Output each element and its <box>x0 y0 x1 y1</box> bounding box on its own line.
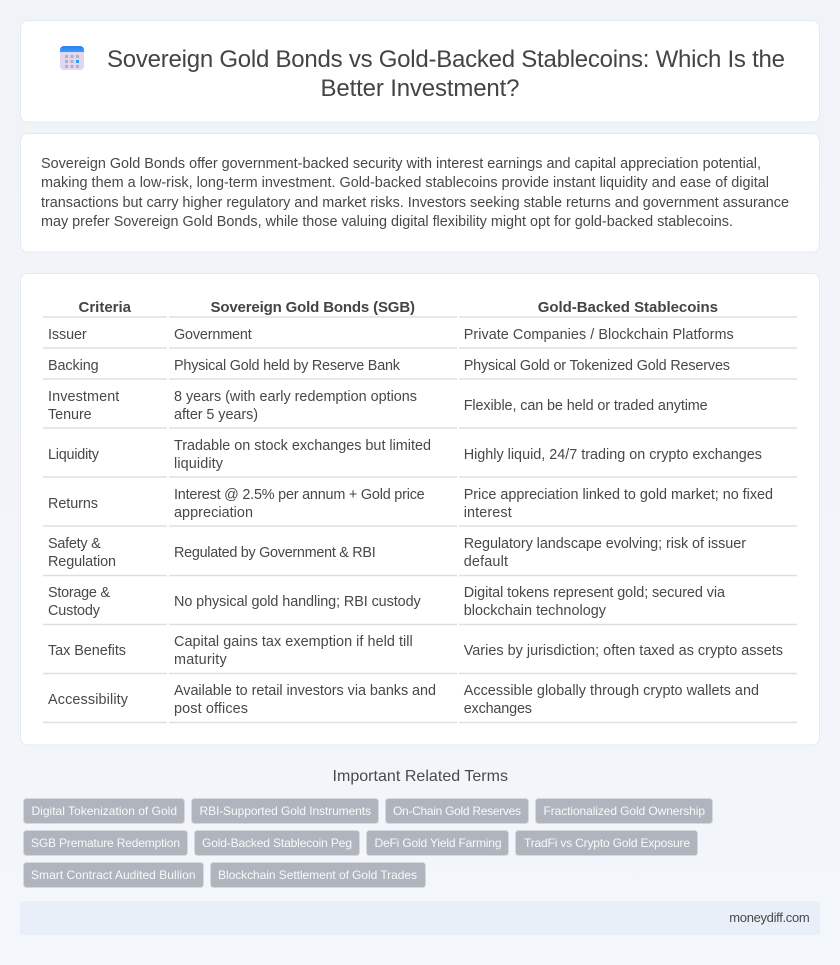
tag <box>536 798 712 824</box>
row: tax benefits: Tax Benefits <box>48 643 126 659</box>
row: issuer <box>48 327 734 343</box>
row: backing: Physical Gold held by Reserve Bank <box>174 358 401 374</box>
title: Better Investment? <box>320 75 520 102</box>
row: backing: Physical Gold or Tokenized Gold Reserves <box>464 358 730 374</box>
row: accessibility <box>48 683 759 717</box>
tag <box>24 862 204 888</box>
row: safety and regulation: Safety & <box>48 536 101 552</box>
header card <box>20 20 820 122</box>
row: tax benefits: Capital gains tax exemption if held till <box>174 634 413 650</box>
summary text: Sovereign Gold Bonds offer government-backed security with interest earnings and capital appreciation potential, <box>41 156 761 172</box>
row: backing: Backing <box>48 358 99 374</box>
row: liquidity: Highly liquid, 24/7 trading on crypto exchanges <box>464 447 762 463</box>
row: tax benefits: maturity <box>174 652 227 668</box>
row: liquidity: Tradable on stock exchanges but limited <box>174 438 431 454</box>
tag <box>386 798 528 824</box>
tag: Digital Tokenization of Gold <box>32 804 177 818</box>
row: accessibility: Accessibility <box>48 692 129 708</box>
tag: Blockchain Settlement of Gold Trades <box>218 868 417 882</box>
row: liquidity: Liquidity <box>48 447 100 463</box>
row: accessibility: exchanges <box>464 701 532 717</box>
tag <box>192 798 378 824</box>
icon: calendar <box>60 46 84 70</box>
footer bar <box>20 901 820 935</box>
summary text: transactions but carry higher regulatory and market risks. Investors seeking stable returns and government assurance <box>41 195 789 211</box>
row: safety and regulation: Regulatory landscape evolving; risk of issuer <box>464 536 746 552</box>
tag <box>194 830 360 856</box>
tag: Fractionalized Gold Ownership <box>544 804 705 818</box>
row: backing <box>48 358 730 374</box>
row: storage and custody: Storage & <box>48 585 110 601</box>
tag: DeFi Gold Yield Farming <box>374 836 502 850</box>
row: returns: Interest @ 2.5% per annum + Gold price <box>174 487 425 503</box>
row: storage and custody: No physical gold handling; RBI custody <box>174 594 421 610</box>
tag <box>516 830 698 856</box>
title <box>107 46 785 102</box>
row: tax benefits: Varies by jurisdiction; often taxed as crypto assets <box>464 643 783 659</box>
summary text <box>41 156 789 230</box>
related terms tags <box>24 798 712 888</box>
row: safety and regulation <box>48 536 746 570</box>
row: accessibility: Available to retail investors via banks and <box>174 683 436 699</box>
row: tax benefits <box>48 634 783 668</box>
row: storage and custody <box>48 585 725 619</box>
row: storage and custody: blockchain technology <box>464 603 607 619</box>
tag: On-Chain Gold Reserves <box>393 804 521 818</box>
row: investment tenure: Investment <box>48 389 119 405</box>
tag: RBI-Supported Gold Instruments <box>200 804 371 818</box>
row: returns: appreciation <box>174 505 253 521</box>
table header: Sovereign Gold Bonds (SGB) <box>210 299 415 316</box>
row: investment tenure: Tenure <box>48 407 92 423</box>
tag: Gold-Backed Stablecoin Peg <box>202 836 352 850</box>
row: safety and regulation: Regulation <box>48 554 116 570</box>
row: returns: Price appreciation linked to gold market; no fixed <box>464 487 773 503</box>
row: storage and custody: Digital tokens represent gold; secured via <box>464 585 725 601</box>
row: liquidity: liquidity <box>174 456 224 472</box>
title: Sovereign Gold Bonds vs Gold-Backed Stablecoins: Which Is the <box>107 46 785 73</box>
row: issuer: Issuer <box>48 327 87 343</box>
tag <box>24 798 184 824</box>
footer bar: moneydiff.com <box>729 910 810 925</box>
row: investment tenure: after 5 years) <box>174 407 258 423</box>
summary text: making them a low-risk, long-term investment. Gold-backed stablecoins provide instant liquidity and ease of digital <box>41 175 769 191</box>
table header: Criteria <box>78 299 132 316</box>
tag <box>366 830 508 856</box>
summary card <box>20 134 820 252</box>
comparison table card <box>20 274 820 745</box>
row: returns: interest <box>464 505 512 521</box>
tag <box>210 862 426 888</box>
row: accessibility: Accessible globally through crypto wallets and <box>464 683 759 699</box>
tag: Smart Contract Audited Bullion <box>31 868 196 882</box>
row: returns: Returns <box>48 496 98 512</box>
summary text: may prefer Sovereign Gold Bonds, while those valuing digital flexibility might opt for gold-backed stablecoins. <box>41 214 733 230</box>
row: investment tenure: Flexible, can be held or traded anytime <box>464 398 708 414</box>
row: accessibility: post offices <box>174 701 248 717</box>
row: returns <box>48 487 773 521</box>
tag: SGB Premature Redemption <box>31 836 180 850</box>
table header <box>78 299 718 316</box>
row: liquidity <box>48 438 762 472</box>
tag: TradFi vs Crypto Gold Exposure <box>524 836 690 850</box>
related terms heading: Important Related Terms <box>332 768 508 785</box>
row: issuer: Private Companies / Blockchain Platforms <box>464 327 734 343</box>
row: safety and regulation: default <box>464 554 508 570</box>
tag <box>24 830 188 856</box>
row: investment tenure: 8 years (with early redemption options <box>174 389 417 405</box>
row: storage and custody: Custody <box>48 603 101 619</box>
row: issuer: Government <box>174 327 252 343</box>
table header: Gold-Backed Stablecoins <box>538 299 718 316</box>
row: investment tenure <box>48 389 708 423</box>
row: safety and regulation: Regulated by Government & RBI <box>174 545 376 561</box>
